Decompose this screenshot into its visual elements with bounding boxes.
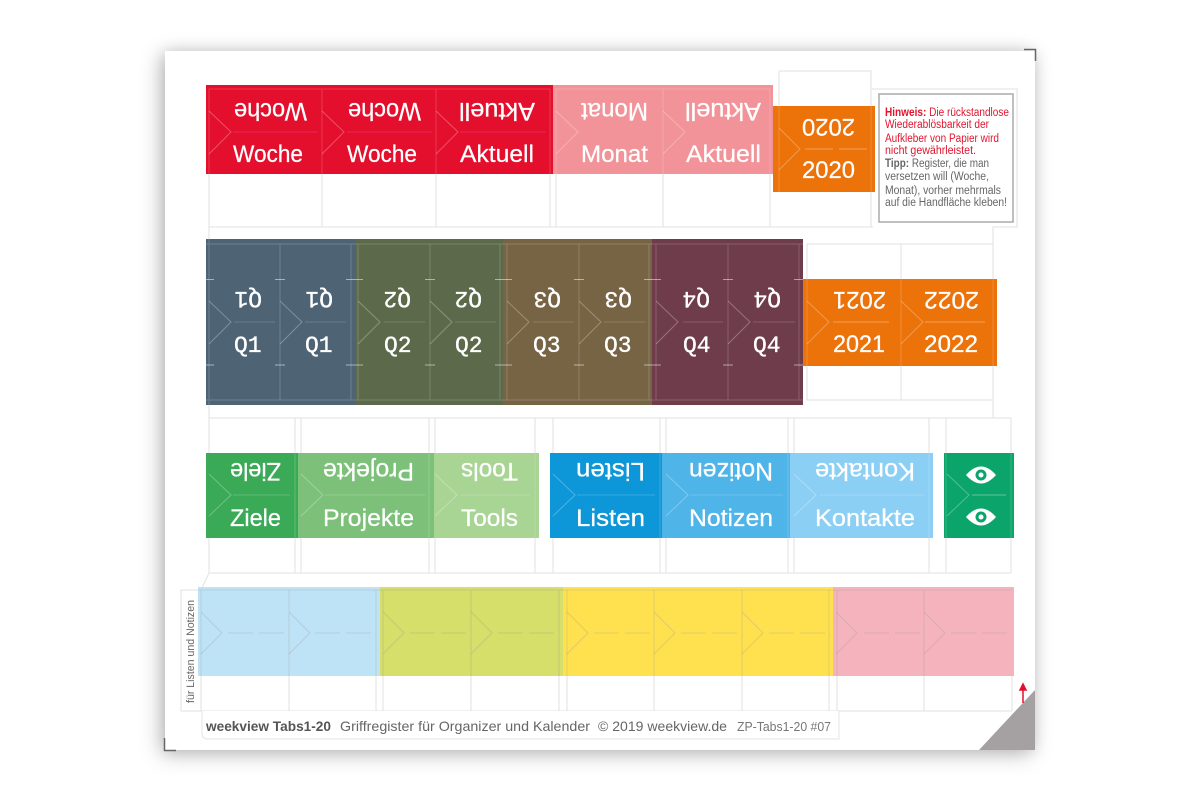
tab label: Q3: Q3: [533, 285, 561, 311]
tab label: Woche: Woche: [233, 141, 303, 168]
hint box: Hinweis: Die rückstandlose: [885, 107, 1009, 119]
hint box: [879, 94, 1013, 222]
tab label: Kontakte: Kontakte: [815, 457, 915, 485]
tab label: 2022: [924, 286, 979, 358]
tab label: Woche: Woche: [234, 97, 307, 125]
tab label: Aktuell pink: Aktuell: [685, 97, 761, 125]
hint box: auf die Handfläche kleben!: [885, 197, 1007, 209]
tab label: Q4: [682, 285, 711, 359]
tab label: Q3 second: Q3: [604, 285, 632, 311]
tab label: Woche: [233, 97, 307, 168]
tab label: Kontakte: [815, 457, 915, 532]
tab label: Q1: Q1: [234, 333, 262, 359]
tab label: Q2 second: Q2: [455, 333, 483, 359]
tab label: Q4: Q4: [682, 285, 710, 311]
row 4: blank colour tabs: [198, 587, 1014, 676]
tab label: Aktuell: Aktuell: [459, 97, 535, 125]
corner fold: [979, 690, 1035, 750]
tab label: Notizen: Notizen: [689, 457, 773, 485]
tab label: Projekte: Projekte: [323, 457, 414, 485]
tab label: Q1 second: Q1: [305, 333, 333, 359]
icon: eye upper: [966, 466, 996, 484]
tab label: Aktuell pink: [685, 97, 761, 168]
tab label: Tools: Tools: [461, 457, 518, 485]
tab label: 2021: 2021: [833, 331, 885, 358]
hint box: Tipp: Register, die man: [885, 158, 989, 170]
tab label: Q2 second: [454, 285, 483, 359]
crop mark: bottom left: [164, 738, 176, 750]
tab label: Aktuell: [459, 97, 535, 168]
tab label: Ziele: Ziele: [230, 457, 281, 485]
tab label: Q3: Q3: [533, 333, 561, 359]
crop mark: top right: [1024, 50, 1036, 61]
tab label: Q1: [234, 285, 262, 359]
tab label: 2022: 2022: [924, 331, 978, 358]
icon: eye lower: [966, 508, 996, 526]
arrow: red up: [1020, 684, 1026, 703]
tab label: Q3 second: Q3: [604, 333, 632, 359]
row 3: green eye tab: [944, 453, 1014, 538]
tab label: Tools: Tools: [461, 505, 518, 532]
row 2: orange year tabs: [803, 279, 997, 366]
tab label: Monat: Monat: [581, 141, 648, 168]
tab label: Woche second: Woche: [348, 97, 421, 125]
tab label: Woche second: Woche: [347, 141, 417, 168]
tab label: Q2 second: Q2: [454, 285, 482, 311]
tab label: Q2: Q2: [383, 285, 411, 311]
tab label: Woche second: [347, 97, 421, 168]
tab label: Q4: Q4: [683, 333, 711, 359]
hint box: Wiederablösbarkeit der: [885, 119, 989, 131]
tab label: Q4 second: Q4: [753, 285, 781, 311]
hint box: Aufkleber von Papier wird: [885, 133, 999, 145]
tab label: Tools: [461, 457, 518, 532]
tab label: Listen: [576, 457, 645, 532]
row 3: green tabs: [206, 453, 539, 538]
row 1: red tabs: [206, 85, 553, 174]
guide outlines: [181, 71, 1017, 711]
footer: [202, 711, 839, 739]
tab label: Q3 second: [604, 285, 632, 359]
row 3: blue tabs: [550, 453, 933, 538]
tab label: 2022: 2022: [924, 286, 979, 313]
tab label: Projekte: Projekte: [323, 505, 414, 532]
row 1: orange 2020 tab: 2020: [802, 157, 855, 184]
tab label: Ziele: [230, 457, 281, 532]
tab label: Listen: Listen: [576, 457, 645, 485]
tab label: Projekte: [323, 457, 414, 532]
tab label: Kontakte: Kontakte: [815, 505, 915, 532]
tab label: Listen: Listen: [576, 505, 645, 532]
tab label: Ziele: Ziele: [230, 505, 281, 532]
tab label: Q1: Q1: [234, 285, 262, 311]
tab label: Notizen: Notizen: [689, 505, 773, 532]
tab label: Notizen: [689, 457, 773, 532]
tab label: Aktuell: Aktuell: [460, 141, 534, 168]
side label box: für Listen und Notizen: [185, 600, 197, 703]
tab label: Q1 second: Q1: [305, 285, 333, 311]
tab label: 2021: 2021: [833, 286, 886, 313]
product name: weekview Tabs1-20: [205, 718, 331, 734]
hint box: versetzen will (Woche,: [885, 171, 989, 183]
tab label: Monat: Monat: [581, 97, 648, 125]
tab label: Q2: Q2: [384, 333, 412, 359]
row 2: quarter tabs: [206, 239, 803, 405]
tab label: Q3: [533, 285, 561, 359]
tab label: Monat: [581, 97, 648, 168]
hint box: Monat), vorher mehrmals: [885, 185, 1001, 197]
tab label: Q4 second: [753, 285, 781, 359]
row 1: orange 2020 tab: 2020: [802, 113, 855, 140]
paper sheet: [165, 51, 1035, 750]
side label box: [181, 590, 198, 711]
tab label: Q1 second: [305, 285, 333, 359]
description: Griffregister für Organizer und Kalender: [340, 718, 590, 734]
tab label: Aktuell pink: Aktuell: [686, 141, 761, 168]
row 1: orange 2020 tab: [773, 106, 875, 192]
copyright: © 2019 weekview.de: [598, 718, 727, 734]
row 1: pink tabs: [553, 85, 773, 174]
tab label: Q4 second: Q4: [753, 333, 781, 359]
tab label: 2021: [833, 286, 886, 358]
article code: ZP-Tabs1-20 #07: [737, 720, 831, 734]
tab label: Q2: [383, 285, 412, 359]
hint box: nicht gewährleistet.: [885, 145, 976, 157]
